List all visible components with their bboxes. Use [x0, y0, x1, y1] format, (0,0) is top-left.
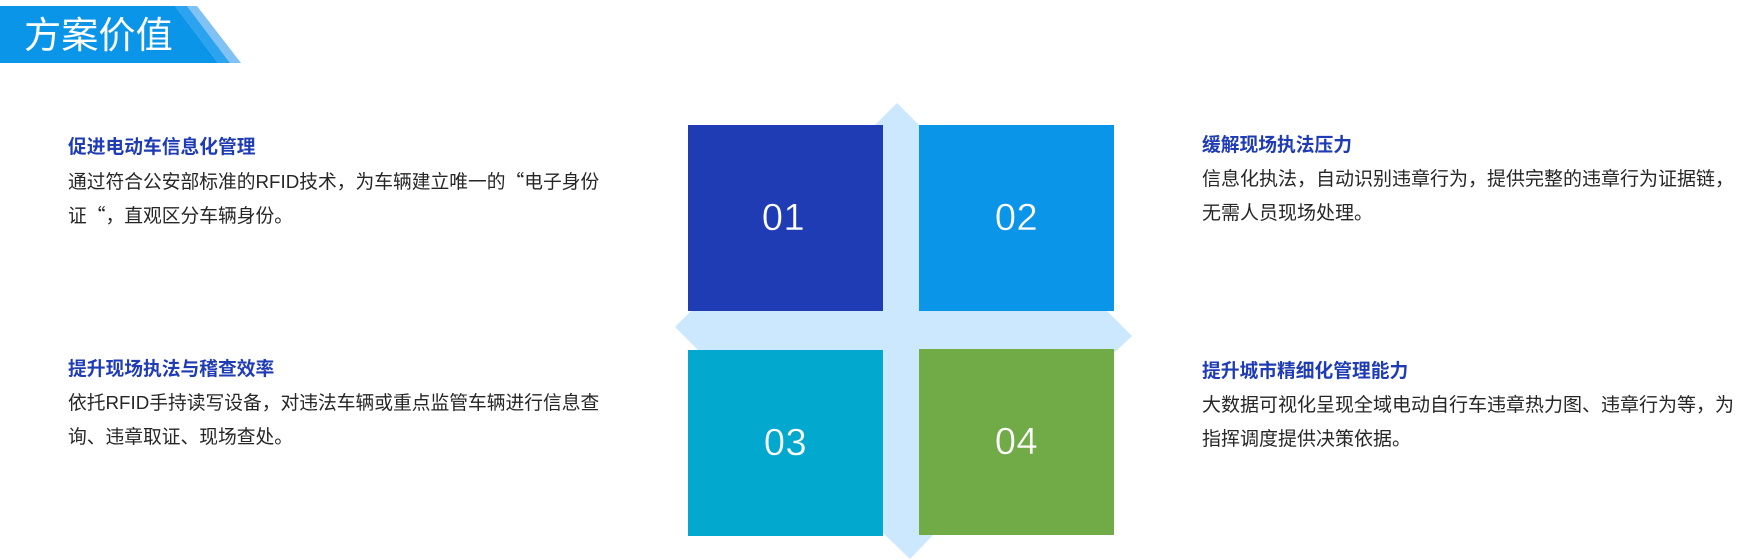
body line 2: 询、违章取证、现场查处。: [68, 426, 293, 447]
body line 1: 依托RFID手持读写设备，对违法车辆或重点监管车辆进行信息查: [68, 392, 599, 413]
body line 1: 通过符合公安部标准的RFID技术，为车辆建立唯一的“电子身份: [68, 167, 599, 194]
body line 2: 指挥调度提供决策依据。: [1202, 429, 1411, 450]
square 03: [688, 350, 883, 536]
body line 1: 大数据可视化呈现全域电动自行车违章热力图、违章行为等，为: [1202, 395, 1734, 416]
text block 04: [1202, 360, 1734, 450]
square 01: [688, 125, 883, 311]
number 02: 02: [995, 197, 1038, 239]
text block 02: [1202, 134, 1734, 224]
heading 02: 缓解现场执法压力: [1202, 134, 1352, 155]
body line 2: 证“，直观区分车辆身份。: [68, 201, 293, 228]
title: 方案价值: [24, 14, 173, 56]
body line 1: 信息化执法，自动识别违章行为，提供完整的违章行为证据链，: [1202, 169, 1734, 190]
banner ribbon shape: [0, 6, 241, 63]
number 01: 01: [762, 197, 805, 239]
header banner: [0, 6, 241, 63]
square 02: [919, 125, 1114, 311]
heading 04: 提升城市精细化管理能力: [1202, 360, 1408, 381]
text block 01: [68, 136, 599, 228]
heading 01: 促进电动车信息化管理: [68, 136, 256, 157]
number 03: 03: [764, 422, 807, 464]
heading 03: 提升现场执法与稽查效率: [68, 358, 274, 379]
body line 2: 无需人员现场处理。: [1202, 203, 1373, 224]
text block 03: [68, 358, 599, 447]
number 04: 04: [995, 421, 1038, 463]
square 04: [919, 349, 1114, 535]
